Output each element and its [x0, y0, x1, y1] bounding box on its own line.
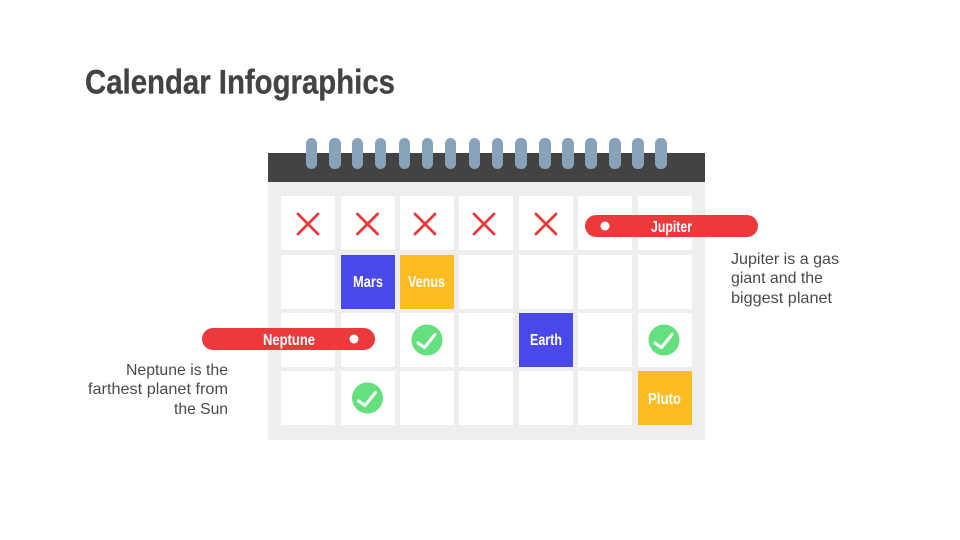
- text: Neptune description: farthest planet from: [88, 381, 228, 398]
- callout pill: Jupiter: Jupiter: [651, 219, 692, 236]
- calendar: [268, 138, 705, 440]
- callout pill: Jupiter: [585, 215, 758, 237]
- red cross marks: [298, 214, 556, 234]
- calendar rings: [306, 138, 667, 169]
- cell: Venus: [400, 255, 454, 309]
- text: Neptune description: the Sun: [174, 401, 228, 418]
- icon: check mark row 3 column 3: [412, 324, 442, 356]
- text: Jupiter description: giant and the: [731, 270, 823, 287]
- calendar header bar: [268, 153, 705, 182]
- title: Calendar Infographics: [85, 64, 395, 102]
- text: Jupiter description: biggest planet: [731, 290, 833, 307]
- cell: Mars: Mars: [353, 274, 383, 291]
- text: Neptune description: [88, 362, 228, 418]
- cell: Mars: [341, 255, 395, 309]
- day grid: [281, 196, 692, 425]
- cell: Earth: Earth: [530, 332, 562, 349]
- cell: Pluto: Pluto: [648, 391, 681, 408]
- cell: Pluto: [638, 371, 692, 425]
- icon: check mark row 3 column 7: [648, 324, 680, 356]
- icon: check mark row 4 column 2: [352, 382, 383, 414]
- text: Neptune description: Neptune is the: [126, 362, 228, 379]
- callout pill: Neptune: Neptune: [263, 332, 315, 349]
- text: Jupiter description: [731, 251, 839, 307]
- callout pill: Neptune: [202, 328, 375, 350]
- cell: Venus: Venus: [408, 274, 445, 291]
- cell: Earth: [519, 313, 573, 367]
- text: Jupiter description: Jupiter is a gas: [731, 251, 839, 268]
- calendar body: [268, 182, 705, 440]
